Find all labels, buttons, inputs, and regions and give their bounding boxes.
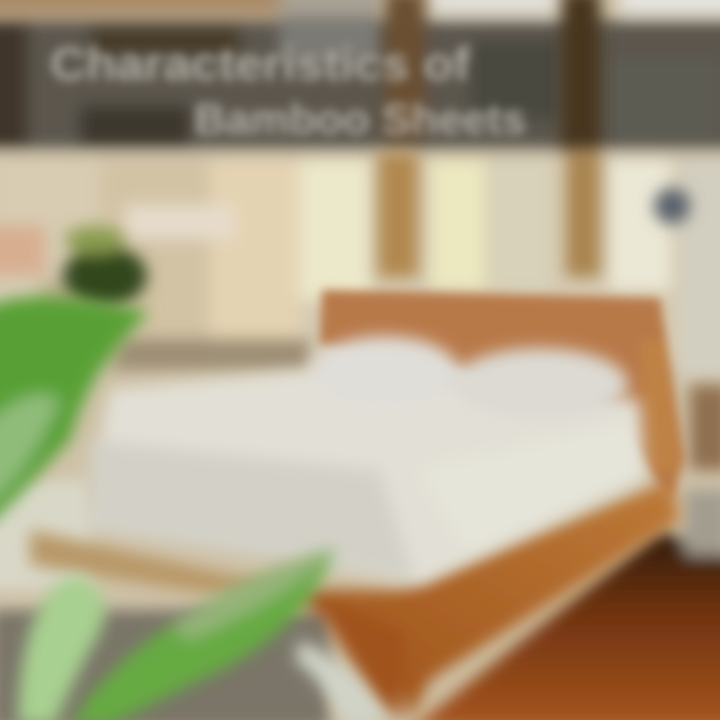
window posts	[378, 0, 690, 277]
title: Bamboo Sheets	[194, 95, 526, 144]
plant: lower leaves	[18, 548, 390, 720]
plant: background pot	[63, 226, 147, 306]
title	[50, 37, 526, 144]
mattress and duvet	[85, 368, 645, 585]
pillows	[311, 336, 628, 420]
bed frame	[30, 480, 680, 720]
floor and lower background	[0, 385, 720, 720]
headboard	[320, 290, 685, 500]
bed	[30, 290, 685, 720]
plant: upper leaves	[0, 296, 150, 530]
title: Characteristics of	[50, 37, 470, 90]
